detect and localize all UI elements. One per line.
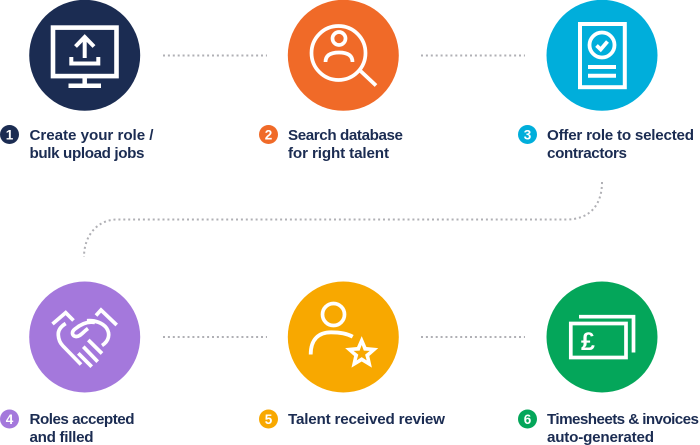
step 1: create role — [0, 0, 154, 162]
label 2: for right talent — [288, 145, 389, 162]
label 5: Talent received review — [288, 411, 445, 428]
badge 6: 6 — [524, 412, 532, 427]
badge 3 — [518, 125, 537, 144]
badge 3: 3 — [524, 128, 532, 142]
label 6: Timesheets & invoices — [547, 411, 699, 428]
step 4: roles accepted — [0, 282, 140, 445]
label 3: contractors — [547, 145, 627, 162]
step 5: talent review — [259, 282, 445, 428]
badge 1 — [0, 125, 19, 144]
step 6: timesheets — [518, 282, 699, 445]
icon: magnifier person — [288, 0, 399, 111]
arrow: step 5 to 6 — [421, 336, 525, 338]
arrow: step 2 to 3 — [421, 54, 525, 56]
badge 2 — [259, 125, 278, 144]
badge 2: 2 — [265, 128, 272, 142]
badge 6 — [518, 410, 537, 428]
badge 4: 4 — [6, 412, 14, 427]
icon: handshake heart — [29, 282, 140, 392]
step 2: search database — [259, 0, 403, 162]
badge 5 — [259, 410, 278, 428]
icon: monitor upload — [29, 0, 140, 111]
icon: document check — [546, 0, 658, 111]
icon: banknotes — [546, 282, 658, 392]
arrow: step 1 to 2 — [163, 54, 267, 56]
label 2: Search database — [288, 127, 403, 144]
label 4: Roles accepted — [30, 411, 134, 428]
label 1: bulk upload jobs — [30, 145, 144, 162]
label 3: Offer role to selected — [547, 127, 694, 144]
step 3: offer role — [518, 0, 694, 162]
label 1: Create your role / — [30, 127, 154, 144]
arrow: step 3 to 4 — [84, 182, 602, 257]
icon: person with star — [288, 282, 399, 392]
arrow: step 4 to 5 — [163, 336, 267, 338]
badge 4 — [0, 410, 19, 428]
badge 5: 5 — [265, 412, 273, 427]
icon: banknotes: £ — [581, 328, 595, 356]
badge 1: 1 — [6, 128, 14, 142]
